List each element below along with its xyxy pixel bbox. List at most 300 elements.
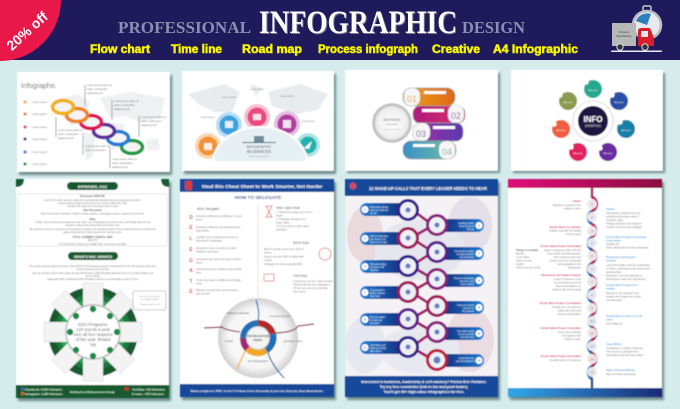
right step descriptions: Workspace with the case sheet <box>606 353 643 357</box>
rules column: 3. Focus only on high-value <box>276 224 309 228</box>
right step descriptions: Due Diligence <box>606 322 623 326</box>
delegate acronym list: Trust your team's abilities and judge- <box>196 278 242 282</box>
expenses text box: Over 50 time staff, senior & related fees, professional consultants such as accounting and other <box>44 199 141 202</box>
right call pills: the top <box>467 228 475 231</box>
panel: staircase ring infographic: amet, consectetur <box>141 119 162 123</box>
rules column: 80/20 Rule <box>293 241 309 245</box>
left call pills: 5 <box>364 264 366 268</box>
numbered step nodes: 4 <box>591 242 593 246</box>
delegation wheel <box>204 298 314 378</box>
delegation wheel: COMMIT <box>225 341 234 343</box>
right call pills <box>440 219 484 367</box>
spine end <box>591 378 593 388</box>
node labels: Milestone <box>588 89 598 92</box>
expenses text box: Includes 10K Impact and Recruiting Grant in 2022 <box>67 205 119 208</box>
delegation wheel: KEY PERFORMANCE <box>248 360 269 363</box>
panel: staircase ring infographic: Lorem ipsum dolor sit <box>141 115 166 119</box>
right step descriptions: Researcher and Impact <box>606 255 636 259</box>
rules column: 70% Rule <box>293 274 307 278</box>
central semicircle: Lorem ipsum dolor sit <box>249 155 270 158</box>
rules column: Delegate the less impactful 80% <box>264 262 303 266</box>
expenses text box: Personnel: $184,791 <box>80 194 106 198</box>
central hub: GRAPHIC <box>585 124 602 128</box>
legend column: Lorem ipsum <box>32 137 47 141</box>
left step descriptions: Finalise the commitment <box>552 305 581 309</box>
rules column: 70% as well as you, delegate it. <box>293 282 331 286</box>
right call pills: the process <box>462 310 475 313</box>
footer: social stats <box>16 385 169 398</box>
left step descriptions: Project Foreseen must <box>554 277 581 281</box>
central disc <box>373 104 411 142</box>
right step descriptions: to better understand area needs and <box>606 266 650 270</box>
right step descriptions <box>606 207 651 376</box>
node labels: Milestone <box>603 152 613 155</box>
left call pills: Ask for help when <box>370 235 389 238</box>
rules column: If someone can do a task at least <box>293 279 333 283</box>
legend column <box>23 100 47 166</box>
step 03 <box>413 123 463 141</box>
right step descriptions: Social Value Project Co-ordi- <box>606 314 643 318</box>
left call pills: ability is about <box>370 292 385 295</box>
right step descriptions: Weekly reports in the platform <box>606 222 642 226</box>
left step descriptions: Agree a response plan with the <box>544 248 581 252</box>
right step descriptions: Workspace under the submission <box>606 277 646 281</box>
left note list: Cross Value <box>516 256 530 259</box>
panel: staircase ring infographic: Lorem ipsum dolor sit <box>114 99 139 103</box>
service navigation labels: Creative <box>432 44 480 56</box>
left call pills: you need it, not <box>370 238 386 241</box>
programs wheel: trip <box>90 342 97 347</box>
left step descriptions: and uploaded to the <box>557 262 582 266</box>
right step descriptions: submission/contract within 1 <box>606 214 640 218</box>
service navigation labels <box>90 44 579 56</box>
right call pills: not on others <box>461 283 475 286</box>
rules column: Figure out your 20% of tasks with <box>264 254 304 258</box>
left call pills: Know that nobody <box>370 206 389 209</box>
footer: social stats: E-news - 672 followers <box>132 392 165 396</box>
right call pills: Your team needs <box>457 330 475 333</box>
central hub <box>578 106 608 136</box>
delegate acronym list: ration. <box>196 260 204 264</box>
right call pills: 12 <box>477 358 481 362</box>
panel: staircase ring infographic: Lorem ipsum dolor sit <box>112 157 137 161</box>
footer banner: Want a high-res PDF of this? Follow Chris Donnelly & join his Step by Step Newsletter. <box>190 389 324 393</box>
right step descriptions: Review of the research and <box>606 291 639 295</box>
delegate acronym list: initiative and grow. <box>196 250 219 254</box>
right call pills: Invest time into <box>459 357 475 360</box>
left step descriptions: of the project <box>565 232 581 236</box>
right call pills: 8 <box>478 306 480 310</box>
left step descriptions: table with topic and <box>558 308 581 312</box>
left call pills: make you better <box>370 347 387 350</box>
orange circle <box>195 133 221 159</box>
programs wheel: over all four seasons <box>73 332 113 337</box>
right step descriptions: Social Value Project Con- <box>606 283 639 287</box>
panel: staircase ring infographic: adipiscing elit <box>58 136 74 140</box>
left step descriptions: achieve life of the social <box>552 288 581 292</box>
left call pills: you have it all <box>370 266 385 269</box>
connector chain <box>408 210 437 360</box>
rules column: It'll free up your time and help <box>293 286 329 290</box>
circle labels: Lorem ipsum <box>222 96 236 99</box>
service navigation labels: Flow chart <box>90 44 150 56</box>
grants text <box>29 265 157 281</box>
central semicircle: INFOGRAPHIC <box>247 145 272 149</box>
delegate acronym list: D <box>189 215 193 221</box>
step 04: 04 <box>442 147 452 157</box>
rules column: efforts. <box>264 250 272 254</box>
footer banner <box>180 384 334 397</box>
expenses text box: Note <box>90 217 96 221</box>
right step descriptions: Admin <box>606 207 615 211</box>
step 01: 01 <box>407 94 417 104</box>
rules column: Time Value Rule <box>276 206 300 210</box>
delegate acronym list: ities. <box>196 270 202 274</box>
expenses text box: TOTAL CURRENT ASSETS, 2022 <box>73 235 113 239</box>
satellite nodes <box>551 79 635 161</box>
right call pills: Focus on managing <box>454 278 475 280</box>
heading: HOW TO DELEGATE <box>235 195 282 201</box>
panel: semicircle business infographic <box>182 71 336 174</box>
left step descriptions: Social Value Project Coordinator <box>539 301 581 305</box>
footer call to action: Interested in business, leadership & self-mastery? Follow Eric Partaker. <box>361 380 487 384</box>
expenses text box: $615,079 <box>88 240 98 242</box>
left step descriptions: Social Value Coordinator <box>549 225 581 229</box>
service navigation labels: Time line <box>171 44 222 56</box>
delegate acronym list: Why Delegate? <box>197 207 220 211</box>
header banner: Steal this Cheat Sheet to Work Smarter, Not Harder <box>202 184 323 189</box>
right step descriptions: Copy Writer <box>606 238 621 242</box>
panel: expenses and grants sheet <box>16 179 171 401</box>
delegate acronym list: E <box>189 289 193 295</box>
expenses text box: increase in office space prices that occurred this year <box>65 224 120 227</box>
circle labels <box>201 88 315 123</box>
header banner <box>180 179 334 192</box>
programs wheel <box>44 283 142 381</box>
icon: hourglass <box>266 206 272 217</box>
delegation wheel: THE DELEGATION <box>247 335 269 338</box>
discount badge <box>0 0 61 61</box>
panel: four-step business pills <box>345 70 500 173</box>
left call pills <box>360 203 405 354</box>
left note list: Benefit <box>516 252 524 256</box>
numbered step nodes: 8 <box>591 294 593 298</box>
left step descriptions: Overall review of response <box>549 358 581 362</box>
numbered step nodes: 11 <box>590 332 594 336</box>
left call pills: A real leader's <box>370 289 385 292</box>
left call pills: Stop pretending <box>370 263 387 266</box>
left step descriptions: and agreed with <box>562 334 582 338</box>
central semicircle: BUSINESS <box>247 149 271 155</box>
panel: staircase ring infographic: amet, consectetur <box>87 87 108 91</box>
rules column: lower value. <box>276 220 291 224</box>
left note list: Value to Local <box>516 260 532 262</box>
right call pills: 6 <box>478 278 480 282</box>
left step descriptions: Social Value Project Consultant <box>541 326 581 330</box>
right step descriptions: Sign off where necessary <box>606 372 637 376</box>
numbered step nodes: 12 <box>590 344 594 348</box>
left note list: Client end-user needs <box>516 266 541 270</box>
rules column: impact. <box>264 258 273 262</box>
panel: staircase ring infographic: amet, consectetur <box>112 161 133 165</box>
left step descriptions: Recommendations to <box>556 284 581 288</box>
node labels: Milestone <box>556 129 566 132</box>
expenses text box: program delivery staff including four of our full time staff in late 2022 <box>58 202 128 205</box>
numbered step nodes: 13 <box>590 358 594 362</box>
delegation wheel: EMBRACE OWNERSHIP <box>226 312 250 315</box>
circle labels: Lorem ipsum <box>201 116 215 119</box>
panel: twelve wake-up calls sheet <box>345 179 500 400</box>
footer: social stats: Building Good Media presence through <box>70 391 115 394</box>
heading: grants: GRANTS MAC AWARDS <box>74 255 113 259</box>
delegate acronym list: right tasks. <box>196 228 210 232</box>
right call pills: Leading means <box>458 223 475 225</box>
right step descriptions: Tracker must be kept updated <box>606 225 642 229</box>
left call pills: decisions <box>370 323 380 325</box>
left call pills: than others <box>370 350 382 353</box>
right step descriptions: Social Value Project Consultant <box>606 235 646 239</box>
right call pills: your time, and <box>459 280 475 283</box>
left step descriptions: Update Log with full details <box>549 228 582 232</box>
expenses text box: In 2022, some non-personnel expenses were lower, even though payments could result, staff budget was 1/3 over <box>35 221 151 224</box>
left step descriptions: Admin <box>573 199 581 203</box>
left call pills: 3 <box>364 236 366 240</box>
panel: staircase ring infographic: Lorem ipsum dolor sit <box>85 144 110 148</box>
service navigation labels: Road map <box>242 44 302 56</box>
delegate acronym list: Elevate overall team performance <box>196 288 238 292</box>
world map backdrop <box>55 92 165 160</box>
right call pills: Focus on results <box>457 304 475 307</box>
title: INFOGRAPHIC <box>259 5 457 41</box>
grants text: Additionally, MAC contributes $100K annually to Stream & year Messages Lands of Three <box>47 278 139 281</box>
delegation wheel: COACHING SUPPORT <box>269 315 291 318</box>
rules column: 1. Determine what your time is <box>276 210 313 214</box>
blue circle <box>216 112 242 138</box>
rules column <box>264 206 333 294</box>
expenses text box: We continue to focus our resources on increasing the quality of the programs offered. We increased payments to writers and <box>29 228 156 231</box>
panel: staircase ring infographic <box>17 72 172 175</box>
right call pills: 4 <box>478 252 480 256</box>
rules column: 80% of results come from 20% of <box>264 247 304 251</box>
icon: target <box>319 248 331 260</box>
rules column: 2. Delegate all tasks of a <box>276 217 306 221</box>
left note list <box>516 249 541 270</box>
right step descriptions: Head of Service/SR etc <box>606 368 636 372</box>
panel: social value process timeline <box>508 179 664 400</box>
right step descriptions: Completion of written response <box>606 346 644 350</box>
right step descriptions: sultant <box>606 286 615 290</box>
numbered step nodes: 9 <box>591 306 593 310</box>
panel: staircase ring infographic: adipiscing elit <box>114 107 130 111</box>
panel: staircase ring infographic: amet, consectetur <box>114 103 135 107</box>
footer: social stats: Facebook: 6,000 followers <box>25 388 63 392</box>
left call pills: 9 <box>364 318 366 322</box>
left call pills: their team <box>370 295 380 298</box>
dotted ring <box>573 101 613 141</box>
circle glyphs <box>406 208 440 364</box>
left call pills: together <box>370 269 379 272</box>
step 02 <box>413 105 465 123</box>
delegate acronym list: Generate new ideas through collabo- <box>196 257 242 261</box>
right step descriptions: Research must be uploaded to <box>606 274 643 278</box>
expenses text box: $111,512 includes operations, hosting, printing, supplies, technology expense, programming expense <box>41 212 145 216</box>
delegate acronym list: Empower team members to take <box>196 246 237 250</box>
node labels: Milestone <box>563 101 573 104</box>
right call pills: not agreeing with <box>456 253 475 256</box>
left step descriptions: Copy Writer and Researcher <box>547 252 581 256</box>
bottom gradient band <box>508 388 662 397</box>
numbered step nodes: 3 <box>591 230 593 234</box>
title: DESIGN <box>462 18 526 37</box>
left call pills: 1 <box>364 208 366 212</box>
right call pills: from the front <box>460 336 474 339</box>
node labels: Milestone <box>614 101 624 104</box>
circle labels: Lorem ipsum <box>280 95 294 98</box>
legend column: Lorem ipsum <box>32 125 47 129</box>
delegate acronym list: Enhance efficiency by assigning the <box>196 225 241 229</box>
delegate acronym list: team. <box>196 218 203 222</box>
left step descriptions: Project Leads <box>565 337 582 341</box>
step 03: 03 <box>416 129 426 139</box>
numbered step nodes: 2 <box>591 216 593 220</box>
footer call to action: You'll get 40+ high-value infographics for free. <box>384 390 464 394</box>
wheel callout: See a full list of events <box>139 295 160 298</box>
delegate acronym list: A <box>189 268 193 274</box>
right step descriptions: commitments <box>606 298 623 302</box>
right step descriptions: Information updated onto the <box>606 211 641 215</box>
legend column: Lorem ipsum <box>32 100 47 104</box>
delegate acronym list: big-picture strategies. <box>196 238 223 242</box>
grants text: Also, we funded by pair of same grant, the Ben Hill Grounds a 2023 Mindfully raised and fund it for students Master and <box>32 272 154 275</box>
panel: radial info graphic <box>511 70 665 173</box>
icon circles <box>398 200 446 370</box>
left call pills: Your failure will <box>370 344 386 347</box>
purple circle <box>274 111 300 137</box>
left step descriptions: Input case finalised <box>558 330 581 334</box>
left call pills: cares as much as <box>370 209 389 212</box>
numbered step nodes: 1 <box>591 202 593 206</box>
delegation wheel: WHEEL <box>253 339 263 342</box>
title: INFOGRAPHIC <box>260 6 458 42</box>
legend column: Lorem ipsum <box>32 162 47 166</box>
panel: staircase ring infographic: adipiscing elit <box>112 165 128 169</box>
left step descriptions: The response plan and <box>554 255 581 259</box>
footer call to action: Try my free newsletter (link in bio and post footer). <box>380 385 468 389</box>
right step descriptions: Local KPI profile must be undertaken <box>606 263 651 267</box>
expenses text box <box>18 194 167 246</box>
left call pills: when it's too late <box>370 241 388 244</box>
right call pills: Get used to people <box>455 250 475 253</box>
right step descriptions: finalise and finalise the social <box>606 294 641 298</box>
right step descriptions: opportunities <box>606 270 622 274</box>
right call pills: your development <box>456 360 474 363</box>
central hub: INFO <box>583 115 603 124</box>
rules column: activities. <box>276 228 287 232</box>
left step descriptions: be completed as a tool <box>554 280 581 284</box>
panel: delegation cheat sheet <box>180 179 336 400</box>
central semicircle <box>213 127 307 162</box>
right call pills: your decisions <box>459 256 475 259</box>
right step descriptions: Analyst <box>606 258 616 262</box>
header band <box>0 0 680 61</box>
heading: grants <box>68 252 118 260</box>
left call pills: you do <box>370 213 378 215</box>
left step descriptions: project must be completed <box>549 258 581 262</box>
grants text: receive sessions and cost a day <box>76 268 110 271</box>
serpentine arcs <box>588 197 597 379</box>
programs wheel: 2023 Programs: <box>78 322 108 327</box>
node labels: Milestone <box>573 152 583 155</box>
panel title: Infographic <box>21 83 56 90</box>
left step descriptions: Social Value Project Consultant <box>541 244 581 248</box>
delegate acronym list: Lighten your workload to focus on <box>196 235 238 239</box>
title: PROFESSIONAL <box>118 18 251 37</box>
central disc: Infographic <box>386 123 399 126</box>
numbered step nodes: 7 <box>591 280 593 284</box>
right call pills: and not on <box>463 307 475 310</box>
numbered step nodes: 14 <box>590 370 594 374</box>
heading: expenses <box>67 182 118 190</box>
right step descriptions: business days <box>606 218 624 222</box>
left note list: Things to consider <box>516 249 538 252</box>
icon: delivery truck with stopwatch: Fast Delivery <box>616 34 632 38</box>
title <box>118 5 526 42</box>
programs wheel: of the year, limited <box>76 337 111 342</box>
right call pills: 2 <box>478 224 480 228</box>
right step descriptions: Copy Writer <box>606 342 621 346</box>
callout leaders <box>56 85 139 168</box>
left step descriptions: Request received in the <box>553 203 581 207</box>
delegate acronym list: ment. <box>196 282 203 286</box>
wheel callout: Programs open to all <box>140 303 160 306</box>
left step descriptions <box>539 199 582 362</box>
left step descriptions: Researcher and Impact Analyst <box>541 273 581 277</box>
numbered step nodes: 6 <box>591 268 593 272</box>
spine start <box>591 188 593 198</box>
expenses text box: began including some travel expenses for training events. <box>63 231 122 234</box>
step 04 <box>403 141 456 159</box>
right step descriptions: Seek clarifications where necessary <box>606 246 649 250</box>
delegation wheel: INDIVIDUAL TASKS <box>284 340 303 343</box>
circle labels: Lorem ipsum <box>301 120 315 123</box>
icon: chat bubbles <box>264 274 274 281</box>
right call pills: being lonely at <box>459 225 474 228</box>
right call pills: 10 <box>477 332 481 336</box>
world map backdrop <box>188 84 328 114</box>
expenses text box: YTD 12/31/2022, largely due to MEEF MAC investments and EIDL <box>59 243 127 246</box>
left note list: Quality <box>516 263 525 266</box>
delegate acronym list: Avoid burnout by sharing responsibil- <box>196 267 242 271</box>
footer call to action <box>345 376 498 397</box>
service navigation labels: Process infograph <box>318 44 418 56</box>
panel: staircase ring infographic: amet, consectetur <box>85 148 106 152</box>
right step descriptions: nator <box>606 318 613 322</box>
expenses text box: Non Personnel <box>83 208 102 212</box>
panel: staircase ring infographic: Lorem ipsum dolor sit <box>58 128 83 132</box>
node labels <box>556 89 631 155</box>
left step descriptions: Social Value Project Consultant <box>541 354 581 358</box>
central disc: Lorem ipsum dolor <box>384 129 401 131</box>
grants text: Senior 100/18 <box>85 275 100 278</box>
left call pills: 11 <box>363 346 367 350</box>
panel: staircase ring infographic: Lorem ipsum dolor sit <box>87 83 112 87</box>
left step descriptions: relevant information <box>557 312 581 316</box>
panel: staircase ring infographic: adipiscing elit <box>87 91 103 95</box>
ring chain <box>52 100 142 154</box>
wheel callout <box>133 291 166 310</box>
legend column: Lorem ipsum <box>32 150 47 154</box>
numbered step nodes: 10 <box>590 320 594 324</box>
